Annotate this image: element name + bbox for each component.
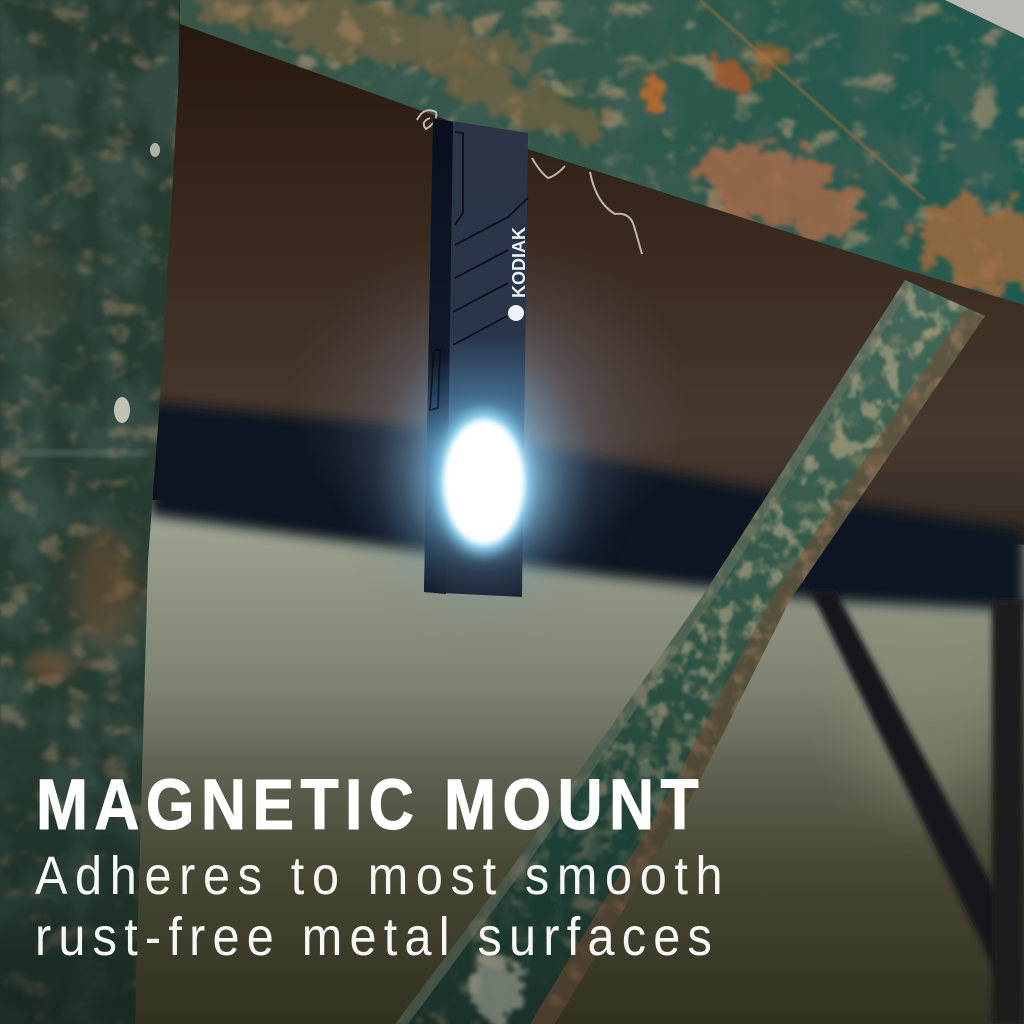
flashlight grip grooves <box>430 132 528 410</box>
beam: left post <box>0 0 190 1024</box>
headline: MAGNETIC MOUNT <box>36 765 699 845</box>
lens glow <box>369 352 599 612</box>
subheading: Adheres to most smooth <box>35 845 723 906</box>
beam: diagonal brace <box>390 270 990 1024</box>
rust patches on the beam <box>188 0 1024 309</box>
subheading: rust-free metal surfaces <box>35 906 712 967</box>
flashlight side facet <box>424 118 453 594</box>
flashlight <box>329 118 639 655</box>
brand mark: KODIAK <box>509 227 529 298</box>
beam: top horizontal <box>170 0 1024 310</box>
flashlight body <box>424 118 528 597</box>
lens <box>437 410 531 554</box>
flashlight glow behind <box>329 285 639 655</box>
corner of pale background at top right <box>945 0 1024 38</box>
cobweb strands <box>417 110 642 254</box>
subheading <box>35 845 723 967</box>
